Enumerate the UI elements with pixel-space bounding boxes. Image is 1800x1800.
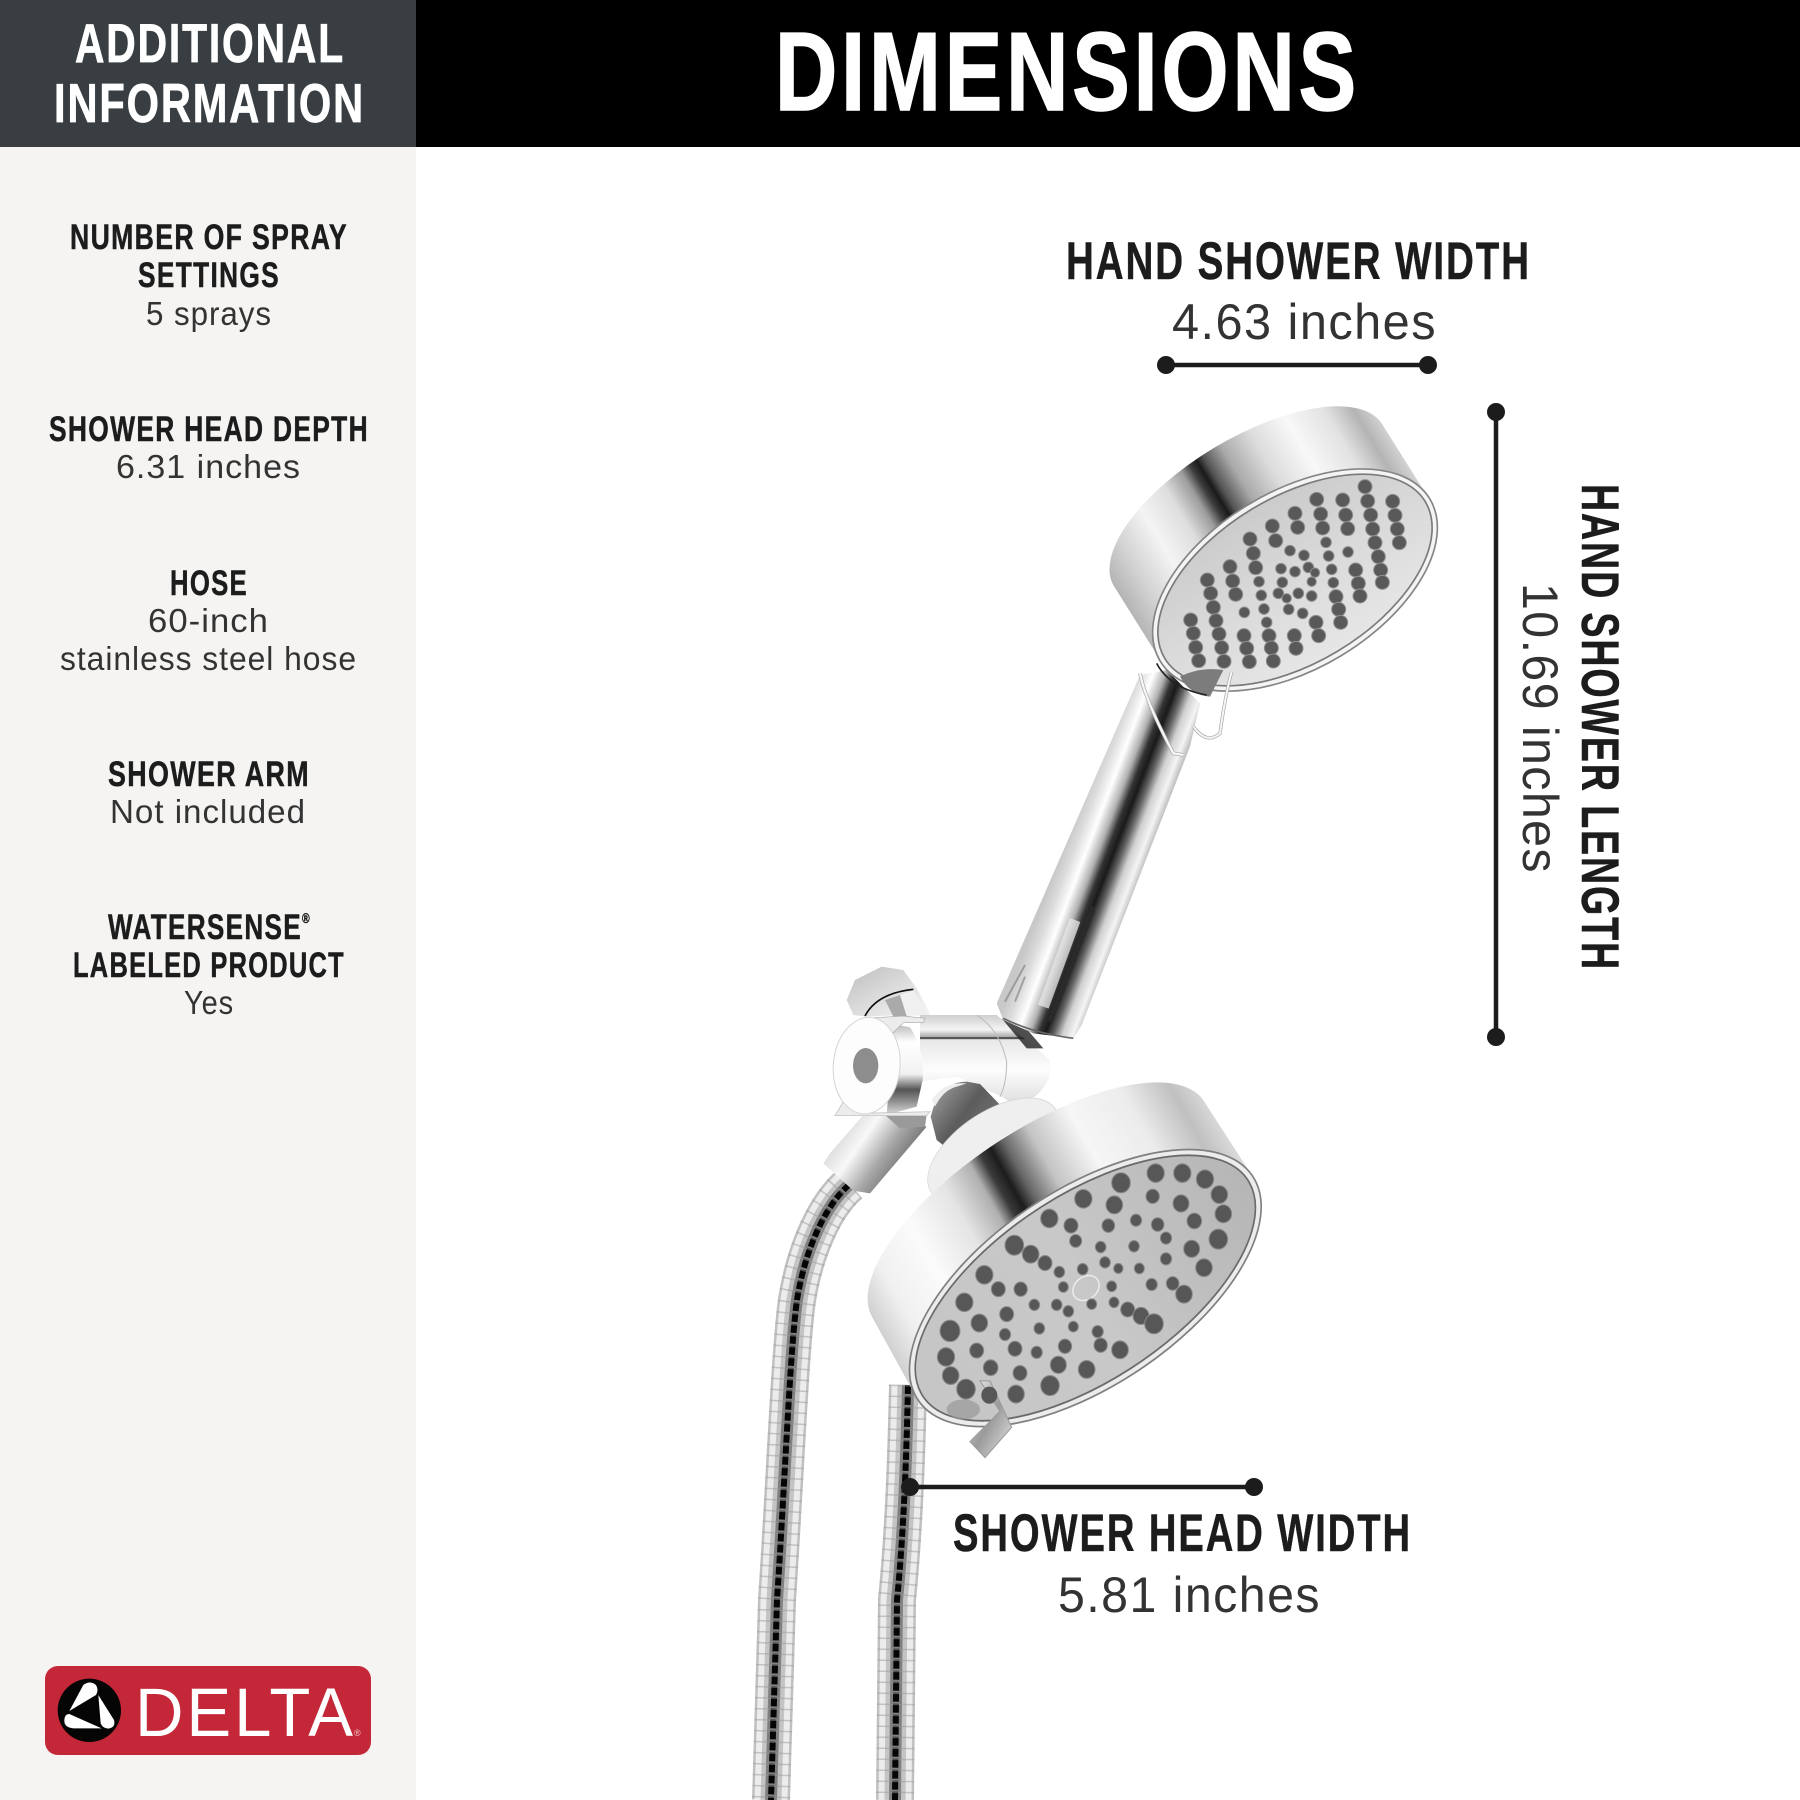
label: 4.63 inches: [1172, 294, 1437, 350]
label: [1512, 484, 1629, 971]
spec: number of spray settings: NUMBER OF SPRAY: [70, 218, 348, 257]
stem to shower head: [931, 1082, 1005, 1153]
collar: [887, 1024, 923, 1115]
end cap disc: [829, 1015, 904, 1117]
upper nut: [847, 967, 930, 1017]
spray lever: [947, 1381, 1012, 1458]
heading: additional information: [54, 12, 365, 134]
label: SHOWER HEAD WIDTH: [953, 1504, 1412, 1563]
label: [1066, 232, 1531, 350]
spray nozzles: [937, 1164, 1232, 1403]
label: 5.81 inches: [1058, 1567, 1321, 1623]
spec: shower head depth: [49, 410, 369, 485]
heading: additional information: ADDITIONAL: [75, 12, 345, 74]
label: 10.69 inches: [1512, 583, 1568, 874]
swivel body: [920, 1015, 1051, 1107]
product: hand shower handle: [997, 670, 1200, 1038]
spec: watersense: WATERSENSE: [108, 908, 368, 947]
label: HAND SHOWER LENGTH: [1570, 484, 1629, 971]
spray nozzles: [1184, 480, 1406, 669]
spec: hose: stainless steel hose: [60, 640, 357, 677]
logo: delta: DELTA: [135, 1674, 356, 1751]
spec: hose: HOSE: [170, 564, 248, 603]
icon: delta faucet mark: [58, 1679, 121, 1742]
label: HAND SHOWER WIDTH: [1066, 232, 1531, 291]
spec: shower arm: SHOWER ARM: [108, 755, 310, 794]
spec: hose: 60-inch: [148, 602, 269, 639]
spec: number of spray settings: 5 sprays: [146, 295, 272, 332]
handle reflections: [1003, 907, 1093, 1038]
measure line: [1157, 356, 1437, 374]
dimension: hand shower width: [1066, 232, 1531, 374]
product: hand shower head: [1079, 366, 1476, 755]
center ring: [1069, 1271, 1103, 1306]
retaining tabs: [863, 1016, 925, 1033]
heading: additional information: INFORMATION: [54, 72, 365, 134]
spec: shower head depth: 6.31 inches: [116, 448, 301, 485]
dimension: hand shower length: [1487, 403, 1629, 1046]
spec: shower arm: [108, 755, 310, 830]
product: hoses: [771, 1184, 908, 1800]
spec: shower head depth: SHOWER HEAD DEPTH: [49, 410, 369, 449]
spec: watersense: [73, 908, 345, 1021]
neck disc: [912, 1077, 1075, 1225]
hose connector: [823, 1115, 927, 1193]
sidebar panel: [0, 0, 416, 1800]
logo: delta: [45, 1666, 371, 1755]
spec: number of spray settings: SETTINGS: [138, 256, 280, 295]
spec: number of spray settings: [70, 218, 348, 332]
spec: watersense: LABELED PRODUCT: [73, 946, 345, 985]
product: bracket and adapter: [823, 967, 1051, 1193]
header band: [0, 0, 1800, 147]
spec: watersense: Yes: [184, 984, 234, 1021]
measure line: [1487, 403, 1505, 1046]
measure line: [901, 1478, 1263, 1496]
hanging clip: [1140, 663, 1232, 755]
spec: shower arm: Not included: [110, 793, 306, 830]
label: [953, 1504, 1412, 1623]
hose: hand shower: [771, 1184, 850, 1800]
logo: delta: ®: [354, 1728, 361, 1738]
dimension: shower head width: [901, 1478, 1412, 1623]
chrome joint: [885, 1115, 927, 1128]
title: DIMENSIONS: [775, 10, 1360, 134]
end cap button: [853, 1048, 878, 1083]
hose: loop behind shower head: [895, 1385, 908, 1800]
product: fixed shower head: [833, 1031, 1303, 1483]
spec: watersense: ®: [302, 910, 311, 926]
spec: hose: [60, 564, 357, 677]
